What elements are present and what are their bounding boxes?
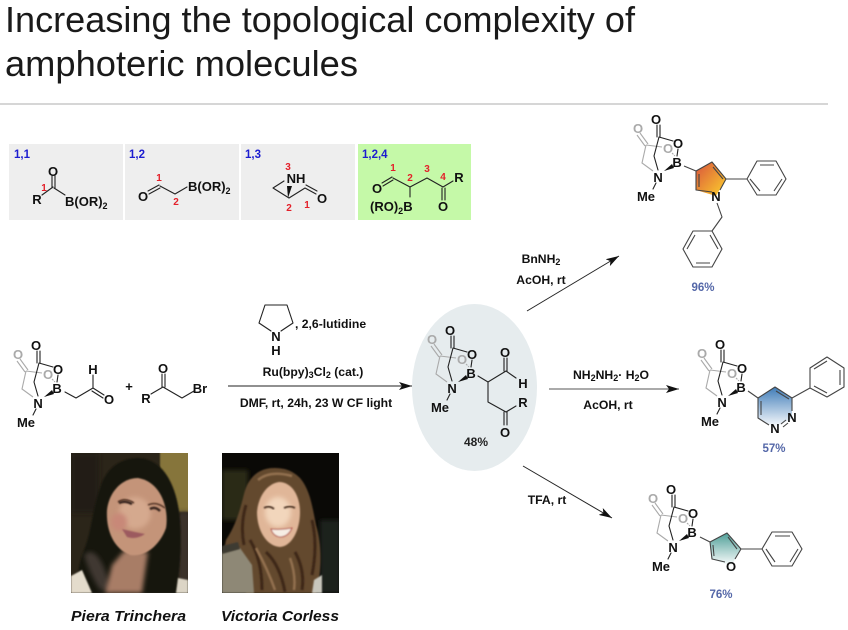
panel: 1,1 motif: 1,1 (14, 149, 31, 161)
product: pyrrole: O (673, 136, 683, 151)
conditions: furan: TFA, rt (528, 493, 566, 507)
product: furan: N (668, 540, 678, 555)
product: furan: O (678, 511, 688, 526)
arrow: to pyrrole (527, 256, 619, 311)
reagent: bromoketone (141, 361, 207, 406)
panel: intermediate ellipse: Me (431, 400, 449, 415)
reagent: bromoketone: R (141, 391, 151, 406)
panel: 1,2,4 motif: 1,2,4 (362, 149, 388, 161)
caption: Piera Trinchera: Piera Trinchera (71, 608, 186, 625)
product: pyrrole: N (711, 189, 721, 204)
catalyst label: 3 (309, 370, 314, 380)
reagent: bromoketone: Br (193, 381, 207, 396)
panel: 1,3 motif (241, 144, 355, 220)
product: pyridazine: N (717, 395, 727, 410)
conditions: pyridazine: 2 (591, 373, 596, 383)
conditions: pyridazine: 2 (634, 373, 640, 383)
photo: Victoria Corless (222, 453, 340, 593)
product: pyrrole: O (651, 112, 661, 127)
starting material: MIDA boronate aldehyde: O (53, 362, 63, 377)
panel: 1,2,4 motif: R (454, 170, 464, 185)
title: amphoteric molecules (5, 43, 358, 84)
conditions: pyrrole: AcOH, rt (516, 273, 566, 287)
panel: 1,2,4 motif (358, 144, 471, 220)
product: pyrrole: N (653, 170, 663, 185)
starting material: MIDA boronate aldehyde: O (13, 347, 23, 362)
title: Increasing the topological complexity of (5, 0, 636, 40)
panel: 1,1 motif: 1 (41, 183, 47, 194)
title (5, 0, 636, 84)
panel: 1,2 motif: 2 (226, 186, 231, 196)
panel: intermediate ellipse: N (447, 381, 457, 396)
conditions label: DMF, rt, 24h, 23 W CF light (240, 396, 392, 410)
panel: intermediate ellipse: O (445, 323, 455, 338)
arrow: to pyridazine (549, 388, 679, 390)
panel: 1,2,4 motif: 3 (424, 164, 430, 175)
product: furan: O (648, 491, 658, 506)
panel: 1,2,4 motif: 2 (407, 173, 413, 184)
panel: 1,3 motif: O (317, 191, 327, 206)
starting material: MIDA boronate aldehyde: H (88, 362, 98, 377)
product: pyrrole: O (633, 121, 643, 136)
panel: intermediate ellipse: R (518, 395, 528, 410)
product: pyridazine: N (770, 421, 780, 436)
panel: intermediate ellipse: B (466, 366, 476, 381)
panel: 1,1 motif: O (48, 164, 58, 179)
starting material: MIDA boronate aldehyde: Me (17, 415, 35, 430)
conditions: pyridazine: NH (596, 368, 613, 382)
panel: 1,2,4 motif: B (403, 199, 413, 214)
panel: 1,1 motif (9, 144, 123, 220)
starting material: MIDA boronate aldehyde: O (104, 392, 114, 407)
arrow: to furan (523, 466, 612, 518)
product: pyridazine: N (787, 410, 797, 425)
panel: 1,3 motif: 3 (285, 162, 291, 173)
conditions: pyridazine (573, 368, 649, 412)
hair: Victoria (224, 468, 320, 593)
panel: 1,2,4 motif: (RO) (370, 199, 398, 214)
panel: intermediate ellipse (412, 304, 537, 471)
yield: furan: 76% (709, 589, 733, 601)
face: Piera (107, 478, 167, 555)
product: pyridazine: Me (701, 414, 719, 429)
starting material: MIDA boronate aldehyde: O (43, 367, 53, 382)
face: Victoria (257, 482, 300, 547)
product: furan: Me (652, 559, 670, 574)
product: pyrrole: Me (637, 189, 655, 204)
product: pyridazine (697, 337, 844, 455)
product: pyridazine: O (715, 337, 725, 352)
conditions: pyridazine: AcOH, rt (583, 398, 633, 412)
reagent: pyrrolidine, 2,6-lutidine: , 2,6-lutidine (295, 317, 366, 331)
hair: Piera (78, 458, 181, 593)
panel: 1,1 motif: B(OR) (65, 194, 103, 209)
starting material: MIDA boronate aldehyde: N (33, 396, 43, 411)
yield: pyrrole: 96% (691, 282, 715, 294)
starting material: MIDA boronate aldehyde: O (31, 338, 41, 353)
panel: 1,2,4 motif: O (438, 199, 448, 214)
panel: intermediate ellipse: O (427, 332, 437, 347)
conditions: pyridazine: · H (618, 368, 634, 382)
panel: 1,2,4 motif: 4 (440, 172, 446, 183)
arrow: main reaction (228, 385, 412, 387)
panel: 1,2,4 motif: 1 (390, 163, 396, 174)
caption: Victoria Corless: Victoria Corless (221, 608, 339, 625)
starting material: MIDA boronate aldehyde: B (52, 381, 62, 396)
reagent: bromoketone: O (158, 361, 168, 376)
panel: 1,2 motif: 2 (173, 197, 179, 208)
product: pyridazine: O (727, 366, 737, 381)
panel: 1,2 motif: 1 (156, 173, 162, 184)
panel: 1,2,4 motif: O (372, 181, 382, 196)
panel: 1,3 motif: 1,3 (245, 149, 261, 161)
conditions: pyridazine: O (640, 368, 649, 382)
product: pyrrole: B (672, 155, 682, 170)
panel: 1,2 motif: B(OR) (188, 179, 226, 194)
panel: 1,1 motif: 2 (103, 201, 108, 211)
starting material: MIDA boronate aldehyde (13, 338, 114, 430)
product: pyridazine: B (736, 380, 746, 395)
product: furan: O (726, 559, 736, 574)
panel: intermediate ellipse: O (500, 345, 510, 360)
panel: 1,3 motif: NH (287, 171, 305, 186)
jacket: Victoria (222, 548, 254, 593)
product: pyridazine: O (697, 346, 707, 361)
panel: 1,2,4 motif: 2 (398, 206, 403, 216)
panel: intermediate ellipse: O (500, 425, 510, 440)
conditions: pyrrole (516, 252, 566, 287)
catalyst label: Cl (314, 365, 326, 379)
product: furan (648, 482, 802, 601)
plus sign: + (125, 379, 133, 394)
product: furan: B (687, 525, 697, 540)
conditions: pyridazine: 2 (613, 373, 618, 383)
product: pyridazine: O (737, 361, 747, 376)
panel: 1,2 motif: O (138, 189, 148, 204)
reagent: pyrrolidine, 2,6-lutidine (259, 305, 366, 358)
product: furan: O (666, 482, 676, 497)
reagent: pyrrolidine, 2,6-lutidine: H (271, 343, 281, 358)
panel: 1,3 motif: 1 (304, 200, 310, 211)
panel: 1,2 motif: 1,2 (129, 149, 145, 161)
panel: intermediate ellipse: O (467, 347, 477, 362)
catalyst label: Ru(bpy) (263, 365, 309, 379)
panel: intermediate ellipse: O (457, 352, 467, 367)
panel: 1,2 motif (125, 144, 239, 220)
conditions: pyridazine: NH (573, 368, 591, 382)
photo: Piera Trinchera (71, 450, 190, 593)
catalyst label: 2 (326, 370, 331, 380)
yield: intermediate: 48% (464, 435, 488, 449)
shirt and chest: Piera (71, 570, 92, 593)
panel: 1,3 motif: 2 (286, 203, 292, 214)
conditions: pyrrole: 2 (555, 257, 560, 267)
reagent: pyrrolidine, 2,6-lutidine: N (271, 329, 281, 344)
panel: 1,1 motif: R (32, 192, 42, 207)
product: pyrrole: O (663, 141, 673, 156)
yield: pyridazine: 57% (762, 443, 786, 455)
conditions: pyrrole: BnNH (522, 252, 555, 266)
panel: intermediate ellipse: H (518, 376, 528, 391)
product: pyrrole (633, 112, 786, 294)
product: furan: O (688, 506, 698, 521)
catalyst label: (cat.) (331, 365, 363, 379)
